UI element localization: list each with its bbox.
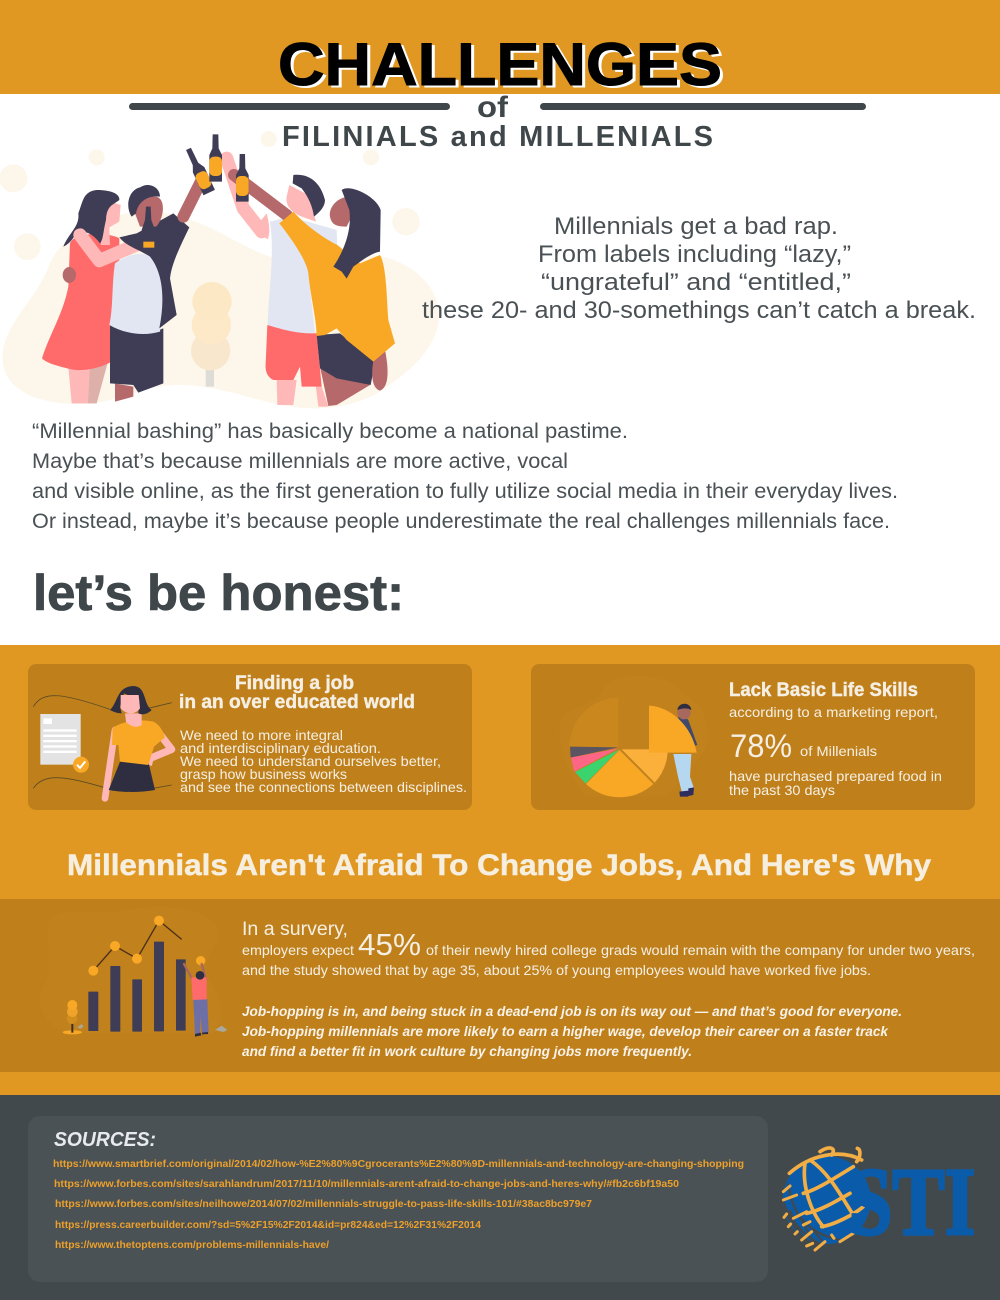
left title rule xyxy=(129,103,450,110)
person: woman in yellow sweater xyxy=(234,175,395,406)
sources list xyxy=(53,1159,744,1251)
illustration: bar chart with person xyxy=(39,907,227,1037)
job hopping text: and find a better fit in work culture by changing jobs more frequently. xyxy=(242,1043,692,1059)
body paragraph: Or instead, maybe it’s because people underestimate the real challenges millennials face. xyxy=(32,510,890,533)
panel heading xyxy=(179,673,415,713)
bottles xyxy=(183,134,249,202)
sources list: https://www.forbes.com/sites/neilhowe/2014/07/02/millennials-struggle-to-pass-life-skills-101/#38ac8bc979e7 xyxy=(55,1199,592,1210)
logo: STI globe xyxy=(780,1148,975,1255)
intro paragraph: From labels including “lazy,” xyxy=(538,241,851,268)
panel body text: the past 30 days xyxy=(729,782,835,798)
survey text: of their newly hired college grads would remain with the company for under two years, xyxy=(426,942,975,958)
panel body text: and interdisciplinary education. xyxy=(180,740,381,756)
body paragraph xyxy=(32,420,898,533)
panel body text xyxy=(180,727,467,795)
heading: change jobs: Millennials Aren't Afraid To Change Jobs, And Here's Why xyxy=(67,849,931,882)
panel body text: of Millenials xyxy=(800,743,877,759)
panel heading: Lack Basic Life Skills xyxy=(729,680,918,701)
panel: finding a job xyxy=(28,664,472,810)
panel body text: and see the connections between disciplines. xyxy=(180,779,467,795)
panel body text: according to a marketing report, xyxy=(729,704,938,720)
sources list: https://www.forbes.com/sites/sarahlandrum/2017/11/10/millennials-arent-afraid-to-change-jobs-and-heres-why/#fb2c6bf19a50 xyxy=(54,1179,679,1190)
job hopping text: Job-hopping is in, and being stuck in a dead-end job is on its way out — and that’s good for everyone. xyxy=(242,1003,902,1019)
stat: 78%: 78% xyxy=(730,728,792,764)
tree xyxy=(191,282,232,387)
rocks xyxy=(77,1024,83,1029)
title: challenges: CHALLENGES xyxy=(278,31,722,98)
panel heading: in an over educated world xyxy=(179,692,415,713)
footer background xyxy=(0,1095,1000,1300)
panel body text xyxy=(729,704,942,798)
right title rule xyxy=(540,103,866,110)
orange section background xyxy=(0,645,1000,1095)
illustration: pie chart and man xyxy=(559,676,708,797)
sources list: https://press.careerbuilder.com/?sd=5%2F15%2F2014&id=pr824&ed=12%2F31%2F2014 xyxy=(55,1220,481,1231)
panel body text: grasp how business works xyxy=(180,766,347,782)
sources list: https://www.thetoptens.com/problems-millennials-have/ xyxy=(55,1240,329,1251)
body paragraph: “Millennial bashing” has basically become a national pastime. xyxy=(32,420,628,443)
survey text: In a survery, xyxy=(242,919,348,940)
stat: 45%: 45% xyxy=(358,927,421,962)
panel body text: We need to more integral xyxy=(180,727,343,743)
illustration: woman with resume xyxy=(33,686,172,798)
panel body text: have purchased prepared food in xyxy=(729,768,942,784)
header band xyxy=(0,0,1000,94)
person xyxy=(184,964,209,1037)
intro paragraph: these 20- and 30-somethings can’t catch a break. xyxy=(422,297,976,324)
body paragraph: Maybe that’s because millennials are more active, vocal xyxy=(32,450,568,473)
bottle right xyxy=(236,154,249,202)
person: woman in red dress xyxy=(42,190,152,403)
survey text: employers expect xyxy=(242,942,354,958)
bottle left xyxy=(183,146,215,195)
sources list: https://www.smartbrief.com/original/2014/02/how-%E2%80%9Cgrocerants%E2%80%9D-millennials-and-technology-are-changing-shopping xyxy=(53,1159,744,1170)
subtitle: filinials and millenials: FILINIALS and MILLENIALS xyxy=(282,121,713,153)
panel body text: We need to understand ourselves better, xyxy=(180,753,441,769)
job hopping text: Job-hopping millennials are more likely to earn a higher wage, develop their career on a faster track xyxy=(242,1023,889,1039)
subtitle: of: of xyxy=(477,91,509,124)
survey text: and the study showed that by age 35, about 25% of young employees would have worked five jobs. xyxy=(242,962,871,978)
panel: job hopping band xyxy=(0,899,1000,1072)
person: man in dark jacket xyxy=(63,180,202,402)
sources heading: SOURCES: xyxy=(54,1129,156,1151)
intro paragraph: Millennials get a bad rap. xyxy=(554,213,838,240)
body paragraph: and visible online, as the first generation to fully utilize social media in their everyday lives. xyxy=(32,480,898,503)
title block xyxy=(129,31,866,153)
bottle centre xyxy=(209,134,222,182)
person: man in white shirt xyxy=(227,158,337,407)
survey text xyxy=(242,919,975,978)
illustration: friends toasting xyxy=(0,131,439,408)
heading: let's be honest: let’s be honest: xyxy=(33,565,404,621)
panel heading: Finding a job xyxy=(235,673,354,694)
globe xyxy=(780,1148,871,1255)
intro paragraph: “ungrateful” and “entitled,” xyxy=(541,269,851,296)
intro paragraph xyxy=(422,213,976,324)
floating dots xyxy=(0,131,420,260)
small tree xyxy=(63,1000,82,1034)
title: challenges: CHALLENGES xyxy=(281,33,725,100)
panel: life skills xyxy=(531,664,975,810)
wordmark: STI xyxy=(849,1148,975,1255)
panel: sources xyxy=(28,1116,768,1282)
background blob xyxy=(3,211,439,408)
job hopping text xyxy=(242,1003,902,1059)
